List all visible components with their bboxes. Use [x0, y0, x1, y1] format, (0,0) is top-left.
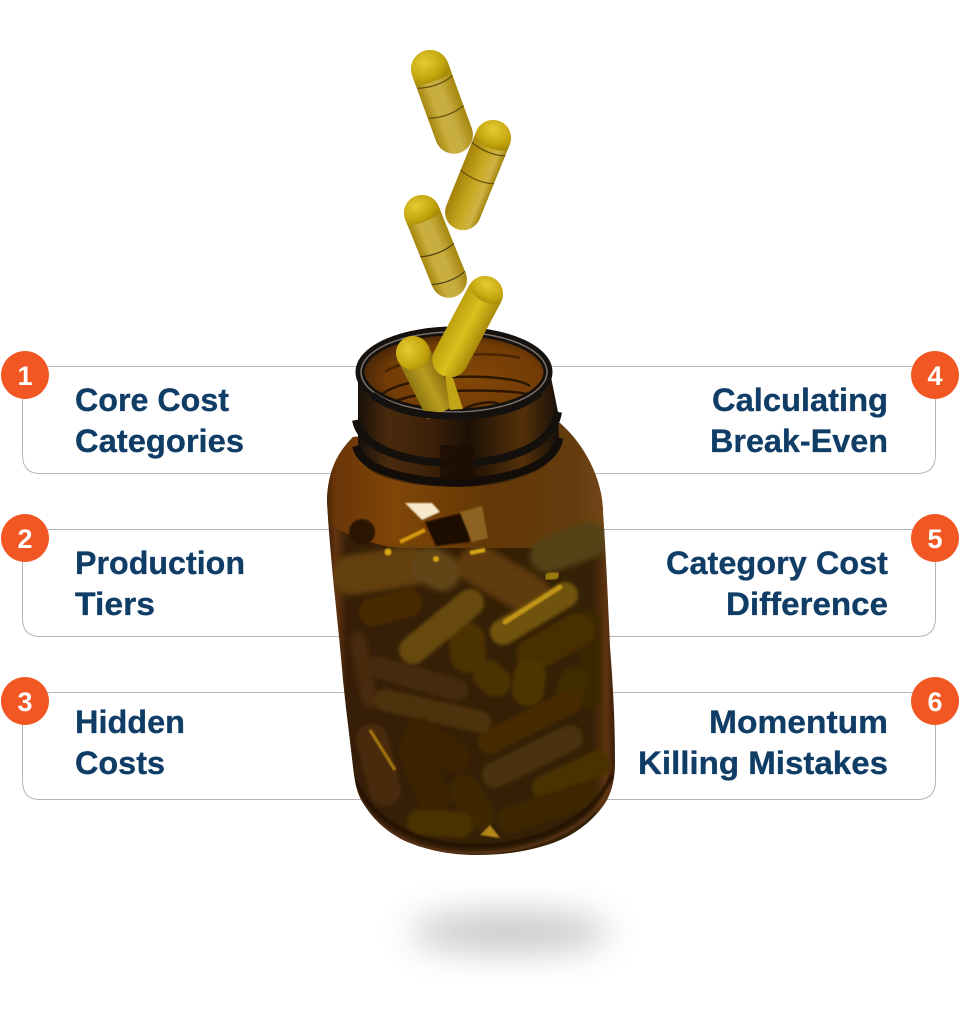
bottle inner opening — [362, 332, 546, 416]
label 6: Momentum — [709, 704, 888, 740]
panel outline 1 — [22, 366, 370, 474]
label 2: Production — [75, 545, 245, 581]
badge 1: 1 — [17, 361, 33, 391]
rim highlight — [361, 332, 547, 412]
capsule 2 — [440, 115, 516, 236]
panel outline 6 — [600, 692, 936, 800]
bottle inner thread rings — [378, 354, 530, 412]
badge 2 — [1, 514, 49, 562]
capsules falling — [372, 45, 540, 420]
label 3: Costs — [75, 745, 165, 781]
badge 3 — [1, 677, 49, 725]
label 2: Tiers — [75, 586, 155, 622]
label 3: Hidden — [75, 704, 185, 740]
label 4: Calculating — [712, 382, 888, 418]
bottle — [320, 331, 620, 855]
badge 6 — [911, 677, 959, 725]
badge 2: 2 — [17, 524, 33, 554]
capsule 3 — [399, 190, 472, 303]
capsule 4 — [426, 270, 509, 384]
label 6: Killing Mistakes — [638, 745, 888, 781]
shoulder glass — [320, 420, 620, 548]
shadow under bottle — [410, 912, 610, 952]
panel: Core Cost Categories — [1, 351, 370, 474]
label 5: Difference — [726, 586, 888, 622]
badge 4 — [911, 351, 959, 399]
capsules inside bottle — [352, 540, 597, 825]
panel outline 4 — [540, 366, 936, 474]
bottle rim — [360, 331, 548, 413]
badge 1 — [1, 351, 49, 399]
bottle neck threads — [356, 372, 559, 487]
capsule 1 — [406, 45, 478, 159]
badge 5 — [911, 514, 959, 562]
badge 5: 5 — [927, 524, 943, 554]
label 1: Categories — [75, 423, 244, 459]
panel outline 5 — [590, 530, 936, 636]
bottle contents and shoulder — [320, 420, 620, 853]
panel: Production Tiers — [1, 514, 360, 636]
badge 3: 3 — [17, 687, 33, 717]
rim front lip over capsules — [372, 393, 540, 416]
bottle body — [327, 423, 615, 855]
capsule 4 tail in bottle — [445, 375, 463, 410]
panel outline 3 — [22, 692, 370, 800]
panel: Category Cost Difference — [590, 514, 959, 636]
label 4: Break-Even — [710, 423, 888, 459]
bottle highlights — [349, 503, 612, 853]
panel: Calculating Break-Even — [540, 351, 959, 474]
panel outline 2 — [22, 530, 360, 636]
panel: Momentum Killing Mistakes — [600, 677, 959, 800]
panel: Hidden Costs — [1, 677, 370, 800]
capsule 5 — [390, 330, 458, 420]
badge 6: 6 — [927, 687, 943, 717]
label 1: Core Cost — [75, 382, 229, 418]
label 5: Category Cost — [666, 545, 888, 581]
badge 4: 4 — [927, 361, 943, 391]
